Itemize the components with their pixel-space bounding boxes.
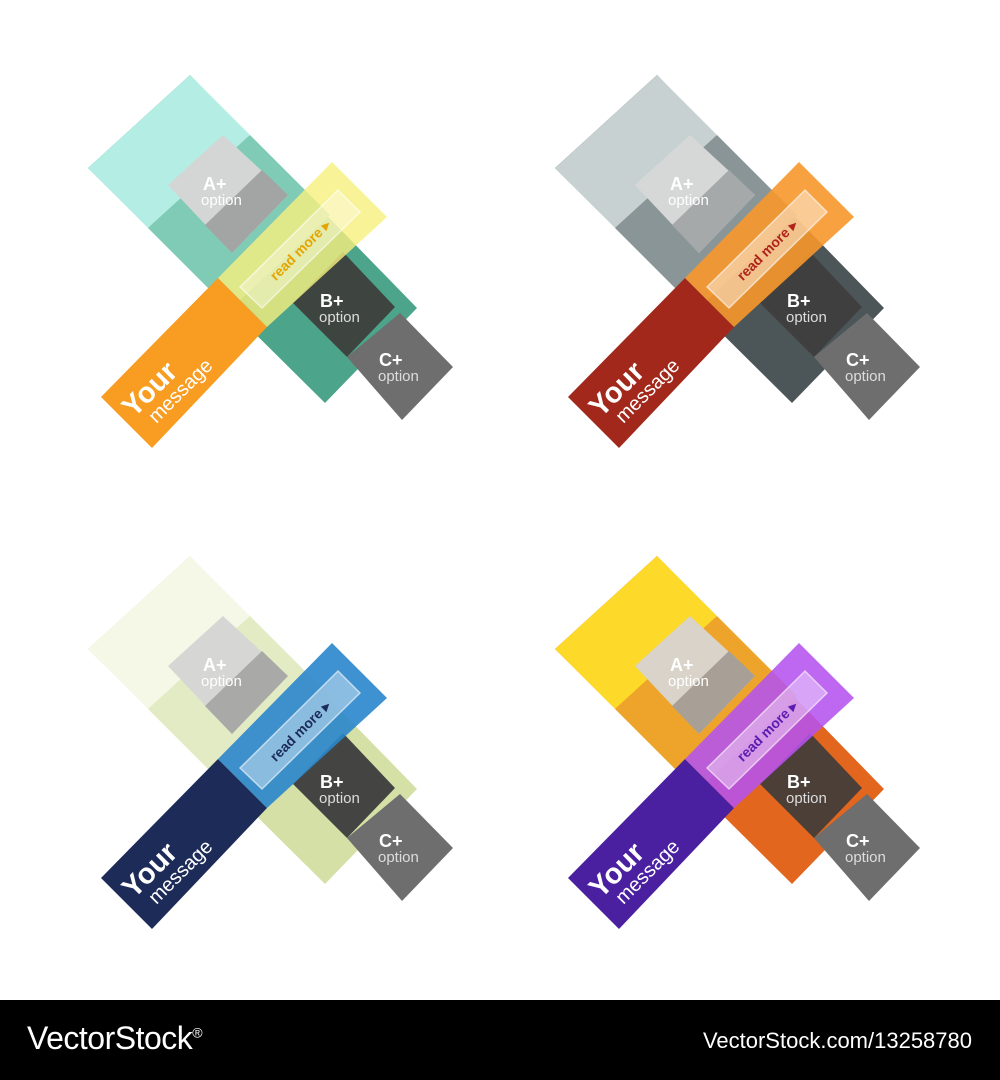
A+ option box: A+: [670, 655, 694, 675]
footer bar: [0, 1000, 1000, 1080]
diagonal band: [555, 75, 884, 403]
B+ option box: [293, 252, 395, 357]
message band: [101, 643, 387, 929]
C+ option box: C+: [846, 350, 870, 370]
C+ option box: option: [845, 368, 886, 385]
A+ option box: A+: [203, 174, 227, 194]
B+ option box: [293, 733, 395, 838]
A+ option box: option: [668, 192, 709, 209]
C+ option box: [347, 794, 453, 901]
Your message text: [116, 335, 217, 436]
Your message text: message: [611, 355, 684, 428]
C+ option box: C+: [846, 831, 870, 851]
A+ option box: [168, 135, 288, 253]
read more button: read more ▸: [734, 697, 801, 764]
C+ option box: option: [378, 849, 419, 866]
cluster: top-left teal/orange: [88, 75, 453, 448]
footer url: VectorStock.com/13258780: [703, 1028, 972, 1053]
read more button: read more ▸: [734, 216, 801, 283]
C+ option box: [814, 313, 920, 420]
A+ option box: option: [668, 673, 709, 690]
B+ option box: B+: [787, 772, 811, 792]
Your message text: message: [144, 355, 217, 428]
message band: [568, 162, 854, 448]
read more button: [707, 190, 827, 308]
C+ option box: [814, 794, 920, 901]
Your message text: Your: [583, 356, 651, 423]
C+ option box: C+: [379, 350, 403, 370]
B+ option box: B+: [320, 772, 344, 792]
read more button: [240, 190, 360, 308]
B+ option box: option: [786, 309, 827, 326]
A+ option box: option: [201, 192, 242, 209]
B+ option box: B+: [787, 291, 811, 311]
read more button: read more ▸: [267, 216, 334, 283]
read more button: [240, 671, 360, 789]
C+ option box: [347, 313, 453, 420]
footer logo: VectorStock®: [27, 1020, 202, 1056]
Your message text: [116, 816, 217, 917]
cluster: top-right grey/red: [555, 75, 920, 448]
A+ option box: [168, 616, 288, 734]
B+ option box: [760, 733, 862, 838]
B+ option box: option: [319, 309, 360, 326]
Your message text: Your: [583, 837, 651, 904]
A+ option box: A+: [203, 655, 227, 675]
cluster: bottom-left cream/navy: [88, 556, 453, 929]
A+ option box: [635, 616, 755, 734]
diagonal band: [555, 556, 884, 884]
C+ option box: option: [378, 368, 419, 385]
Your message text: [583, 335, 684, 436]
A+ option box: A+: [670, 174, 694, 194]
A+ option box: option: [201, 673, 242, 690]
B+ option box: option: [319, 790, 360, 807]
A+ option box: [635, 135, 755, 253]
read more button: read more ▸: [267, 697, 334, 764]
diagonal band: [88, 556, 417, 884]
message band: [101, 162, 387, 448]
read more button: [707, 671, 827, 789]
B+ option box: B+: [320, 291, 344, 311]
B+ option box: option: [786, 790, 827, 807]
Your message text: Your: [116, 837, 184, 904]
Your message text: [583, 816, 684, 917]
diagonal band: [88, 75, 417, 403]
cluster: bottom-right yellow/purple: [555, 556, 920, 929]
Your message text: Your: [116, 356, 184, 423]
C+ option box: option: [845, 849, 886, 866]
B+ option box: [760, 252, 862, 357]
message band: [568, 643, 854, 929]
C+ option box: C+: [379, 831, 403, 851]
Your message text: message: [611, 836, 684, 909]
Your message text: message: [144, 836, 217, 909]
